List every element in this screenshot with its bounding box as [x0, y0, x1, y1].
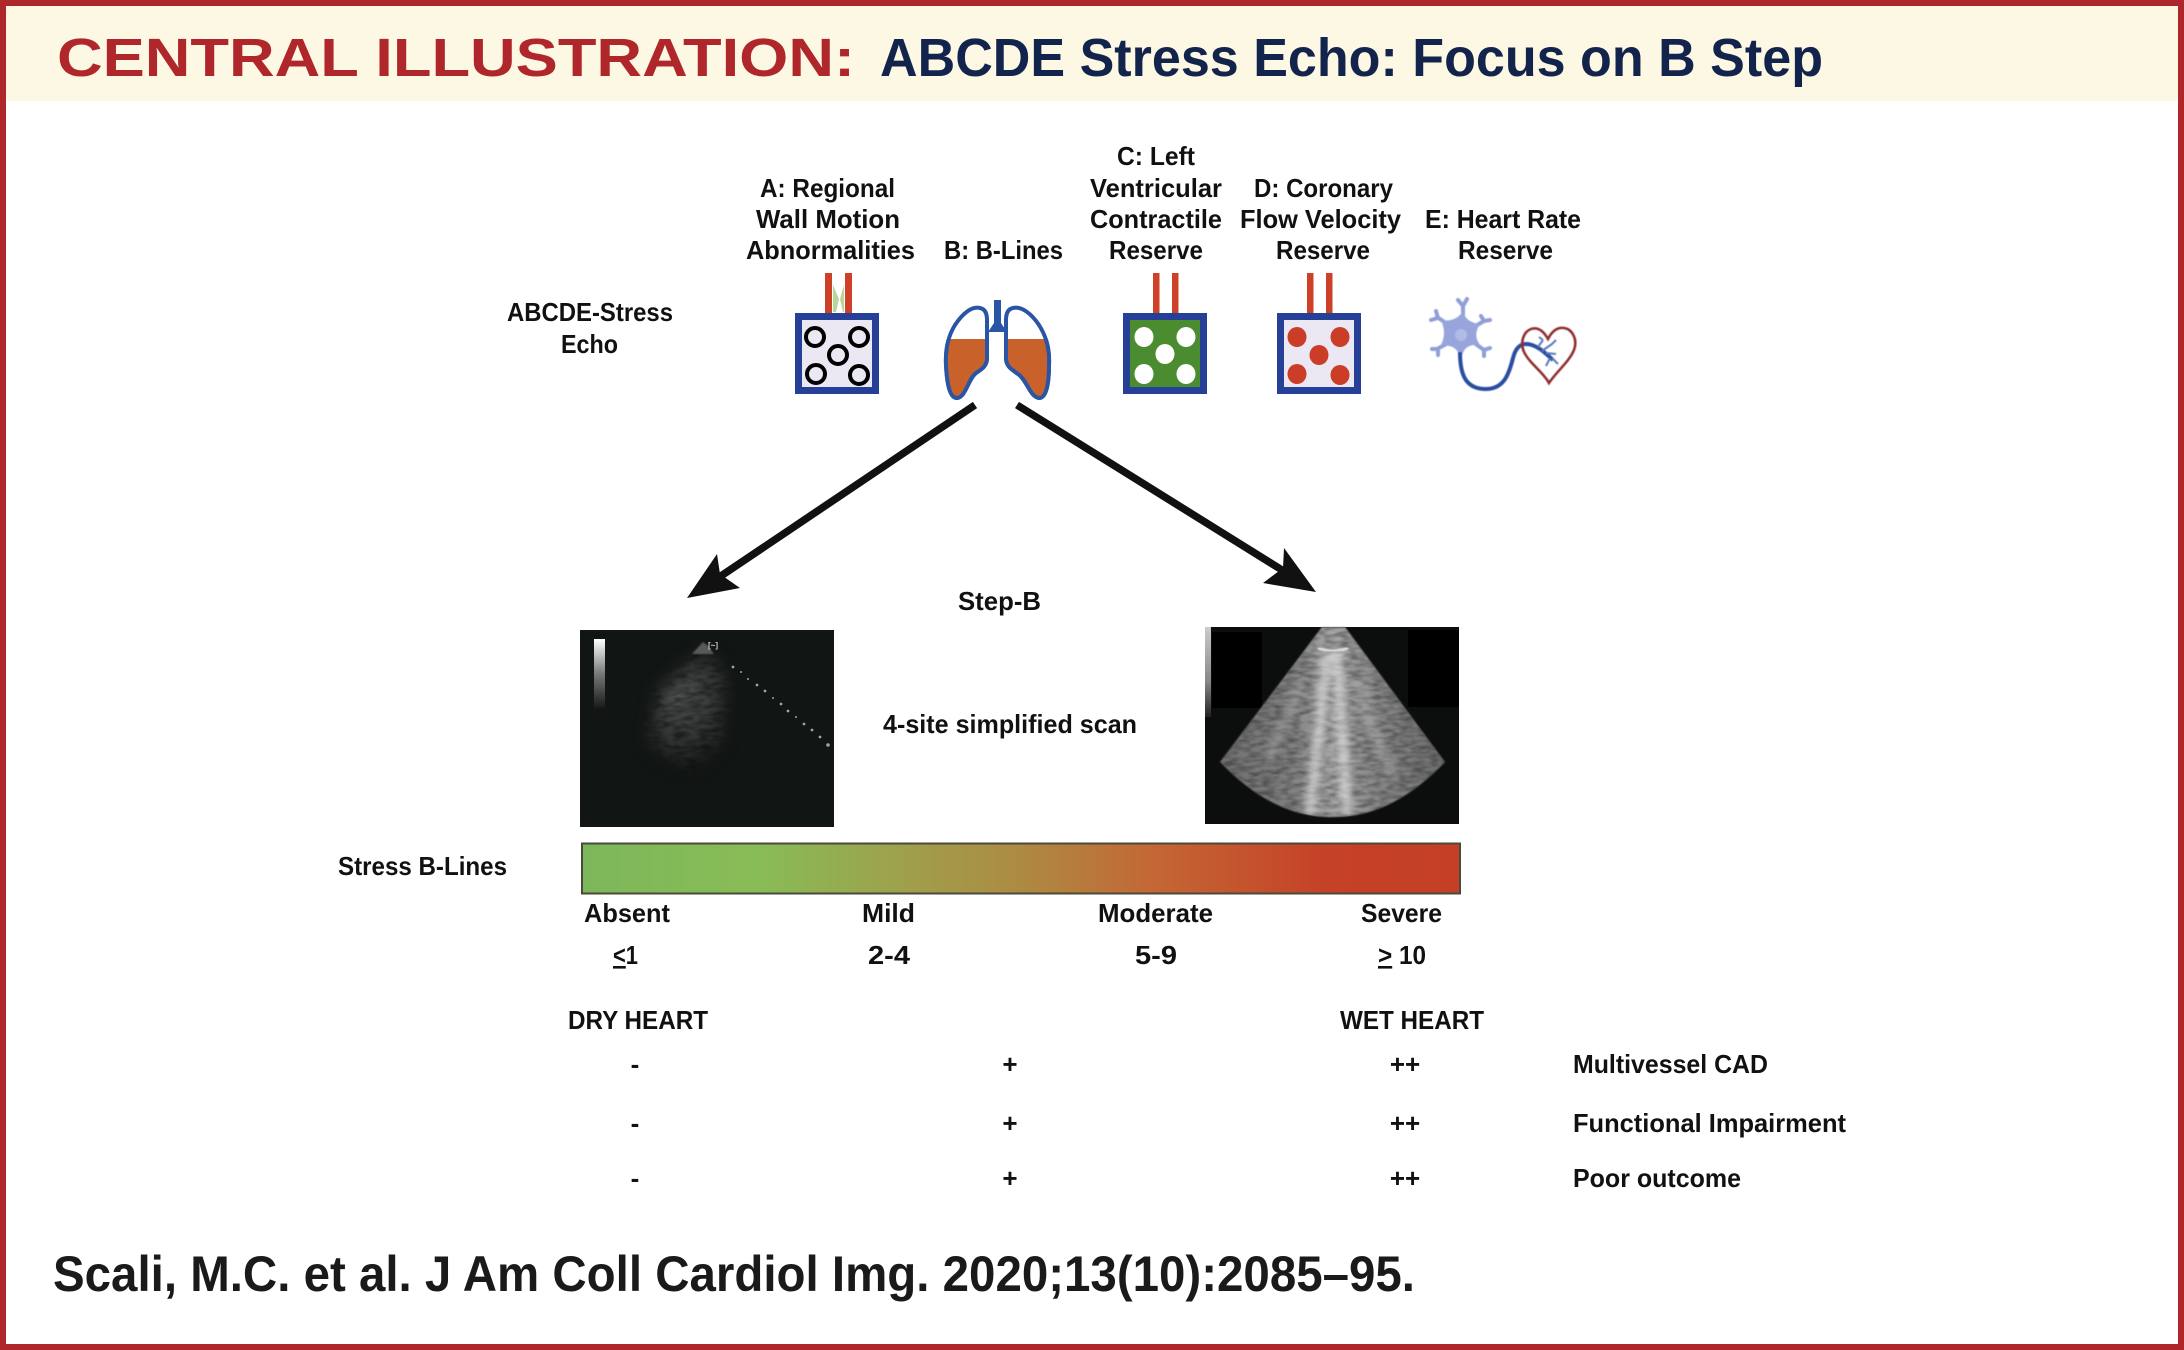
heading E: Reserve [1458, 235, 1553, 265]
heading D [1240, 173, 1402, 265]
heading A: Abnormalities [746, 235, 915, 265]
icon: wall motion box [798, 273, 876, 390]
image: lung ultrasound with no B-lines [580, 630, 834, 827]
severity gradient bar [582, 844, 1460, 894]
column D: coronary flow velocity reserve [1240, 173, 1402, 390]
outcome row: functional impairment: ++ [1390, 1108, 1420, 1138]
row label: ABCDE-Stress Echo: Echo [561, 329, 618, 359]
outcome row: poor outcome [631, 1163, 1741, 1193]
outcome row: multivessel CAD: Multivessel CAD [1573, 1049, 1768, 1079]
heading A: A: Regional [760, 173, 895, 203]
heading A [746, 173, 915, 265]
label: 4-site simplified scan: 4-site simplified scan [883, 709, 1137, 739]
column C: LV contractile reserve [1090, 141, 1222, 390]
image: lung ultrasound with severe B-lines [1205, 627, 1459, 824]
outcome row: multivessel CAD: + [1002, 1049, 1018, 1079]
outcome row: multivessel CAD: - [631, 1049, 639, 1079]
heading D: Flow Velocity [1240, 204, 1402, 234]
column E: heart rate reserve [1425, 204, 1581, 389]
heading E: E: Heart Rate [1425, 204, 1581, 234]
arrow: left to absent scan [687, 405, 975, 598]
citation: Scali, M.C. et al. J Am Coll Cardiol Img. 2020;13(10):2085–95. [53, 1246, 1415, 1302]
severity labels: Moderate [1098, 898, 1213, 928]
label: Stress B-Lines: Stress B-Lines [338, 851, 507, 881]
column B: B-lines [944, 235, 1063, 398]
icon: coronary flow box [1280, 273, 1358, 390]
wet heart heading: WET HEART [1340, 1005, 1484, 1035]
outcome row: poor outcome: ++ [1390, 1163, 1420, 1193]
severity labels: Mild [862, 898, 915, 928]
heading C: Contractile [1090, 204, 1222, 234]
B-line count ranges: 5-9 [1135, 940, 1177, 970]
heading D: D: Coronary [1254, 173, 1393, 203]
probe marker: [~] [708, 641, 718, 650]
label: Step-B: Step-B [958, 586, 1041, 616]
B-line count ranges: <1 [613, 940, 638, 970]
heading A: Wall Motion [756, 204, 900, 234]
outcome row: functional impairment: + [1002, 1108, 1018, 1138]
row label: ABCDE-Stress Echo: ABCDE-Stress [507, 297, 673, 327]
B-line count ranges [613, 940, 1426, 970]
outcome row: multivessel CAD [631, 1049, 1768, 1079]
B-line count ranges: 2-4 [868, 940, 911, 970]
outcome row: functional impairment: Functional Impairment [1573, 1108, 1846, 1138]
heading B: B: B-Lines [944, 235, 1063, 265]
outcome row: poor outcome: - [631, 1163, 639, 1193]
header band [6, 6, 2178, 101]
severity labels [584, 898, 1442, 928]
severity labels: Absent [584, 898, 670, 928]
severity labels: Severe [1361, 898, 1442, 928]
heading E [1425, 204, 1581, 265]
arrow: right to severe scan [1017, 405, 1316, 592]
icon: lungs [946, 300, 1049, 398]
icon: contractile reserve box [1126, 273, 1204, 390]
heading C: Reserve [1109, 235, 1203, 265]
heading C: C: Left [1117, 141, 1195, 171]
heading C [1090, 141, 1222, 265]
title label: CENTRAL ILLUSTRATION: [57, 28, 855, 88]
column A: regional wall motion [746, 173, 915, 390]
row label: ABCDE-Stress Echo [507, 297, 673, 359]
heading C: Ventricular [1090, 173, 1222, 203]
title: ABCDE Stress Echo: Focus on B Step [880, 28, 1823, 88]
B-line count ranges: > 10 [1378, 940, 1426, 970]
outcome row: functional impairment [631, 1108, 1846, 1138]
dry heart heading: DRY HEART [568, 1005, 708, 1035]
outcome row: poor outcome: + [1002, 1163, 1018, 1193]
outcome row: multivessel CAD: ++ [1390, 1049, 1420, 1079]
outcome row: functional impairment: - [631, 1108, 639, 1138]
outcome row: poor outcome: Poor outcome [1573, 1163, 1741, 1193]
heading D: Reserve [1276, 235, 1370, 265]
icon: neuron connected to heart [1431, 299, 1575, 389]
